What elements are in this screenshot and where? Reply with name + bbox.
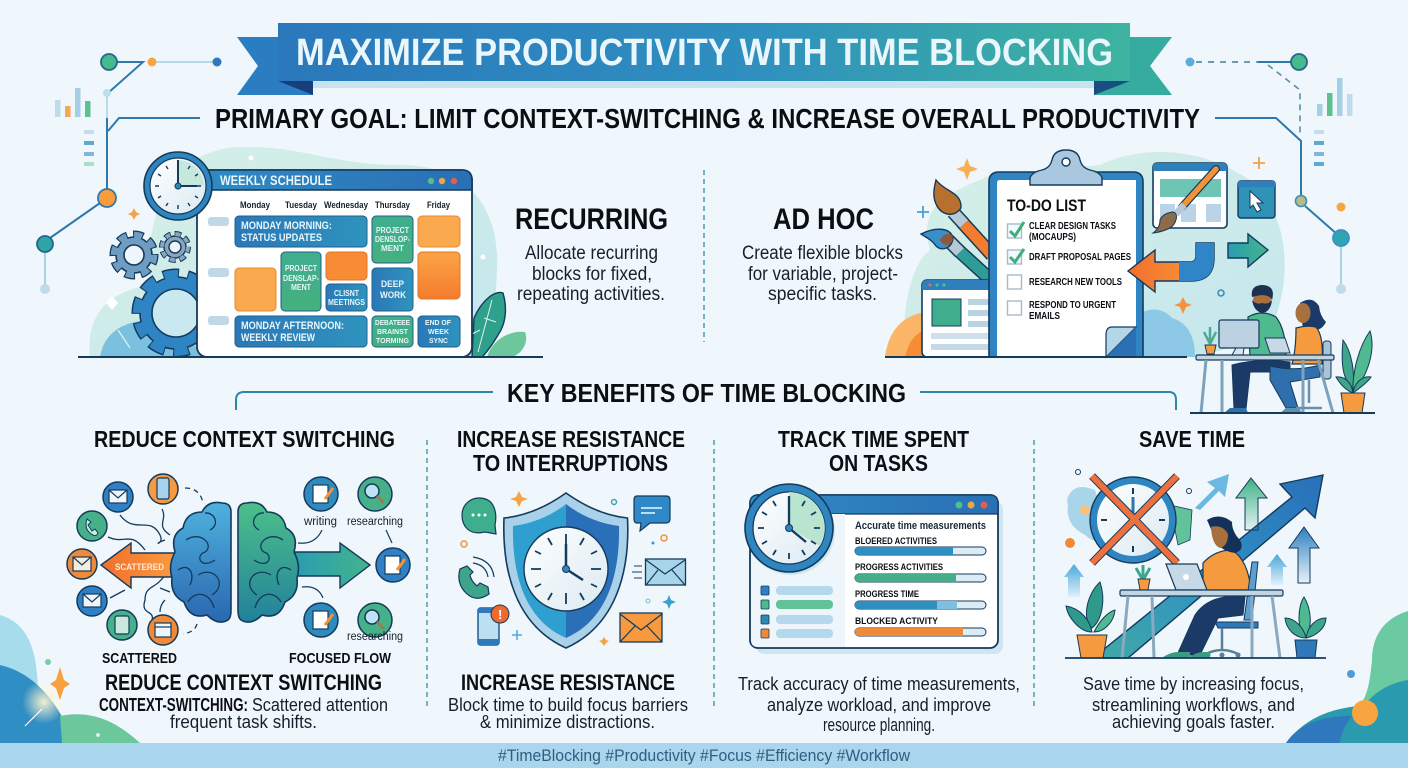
recurring text block: Allocate recurring xyxy=(525,243,658,264)
panel: increase resistance xyxy=(448,426,688,732)
description: resource planning. xyxy=(823,715,935,735)
browser window with brush xyxy=(1153,163,1227,233)
schedule window: TORMING xyxy=(376,336,409,345)
clipboard to-do list: CLEAR DESIGN TASKS xyxy=(1029,221,1116,232)
left plant xyxy=(1066,582,1115,658)
ground line xyxy=(885,356,1187,358)
schedule window: DENSLOP- xyxy=(375,235,410,244)
schedule window: CLISNT xyxy=(334,289,359,298)
day labels: Friday xyxy=(427,200,451,211)
icon: shield with clock xyxy=(504,493,628,648)
desk xyxy=(1196,355,1334,413)
schedule blocks xyxy=(235,216,460,347)
schedule window: SYNC xyxy=(429,336,449,345)
ad hoc heading: AD HOC xyxy=(773,203,874,236)
cloud behind clock xyxy=(1067,487,1110,542)
description: achieving goals faster. xyxy=(1112,712,1275,732)
network decoration: top left xyxy=(37,54,222,294)
schedule window: END OF xyxy=(425,318,451,327)
footer band with hashtags xyxy=(0,743,1408,768)
clipboard to-do list: DRAFT PROPOSAL PAGES xyxy=(1029,252,1131,263)
illustration: weekly schedule xyxy=(78,147,543,357)
key benefits heading xyxy=(236,378,1176,410)
heading: TO INTERRUPTIONS xyxy=(473,450,668,476)
footer band with hashtags: #TimeBlocking #Productivity #Focus #Efficiency #Workflow xyxy=(498,746,911,765)
schedule window: DENSLAP- xyxy=(283,274,319,283)
schedule window: WEEKLY REVIEW xyxy=(241,332,315,344)
focus labels: writing xyxy=(303,516,337,528)
schedule window: MONDAY MORNING: xyxy=(241,220,332,232)
schedule window: MONDAY AFTERNOON: xyxy=(241,320,344,332)
clipboard to-do list: RESEARCH NEW TOOLS xyxy=(1029,277,1122,288)
measurement bars: PROGRESS ACTIVITIES xyxy=(855,562,943,572)
arrow: green right xyxy=(1228,234,1268,267)
cursor tile xyxy=(1238,181,1275,218)
scattered icons xyxy=(67,474,178,645)
title banner xyxy=(237,23,1172,95)
recurring text block xyxy=(515,203,668,305)
schedule window: WEEK xyxy=(428,327,450,336)
icon: sparkles xyxy=(917,158,1224,314)
recurring text block: repeating activities. xyxy=(517,284,665,305)
woman xyxy=(1265,300,1331,413)
icon: phone alert: ! xyxy=(498,607,502,622)
description: CONTEXT-SWITCHING: xyxy=(99,695,248,715)
illustration: to-do list and creative tools xyxy=(885,150,1285,357)
clipboard to-do list: RESPOND TO URGENT xyxy=(1029,300,1116,311)
illustration: brain: SCATTERED xyxy=(115,562,164,573)
icon: wall clock xyxy=(144,152,212,220)
clipboard to-do list: (MOCAUPS) xyxy=(1029,232,1076,243)
icon: clock xyxy=(745,484,835,575)
arrow: focused right xyxy=(295,543,370,588)
icon: phone call xyxy=(459,557,494,598)
schedule window: PROJECT xyxy=(376,226,409,235)
icon: chat bubbles xyxy=(462,496,670,534)
right plant xyxy=(1285,597,1326,658)
description: Save time by increasing focus, xyxy=(1083,674,1304,694)
person working xyxy=(1162,516,1258,658)
icon: leaves xyxy=(470,292,526,357)
subheading: REDUCE CONTEXT SWITCHING xyxy=(105,670,382,695)
arrow: big upward xyxy=(1103,475,1323,658)
schedule window: BRAINST xyxy=(377,327,408,336)
day labels: Thursday xyxy=(375,200,411,211)
description xyxy=(1083,674,1304,732)
icon: gears xyxy=(114,234,215,352)
schedule window: MENT xyxy=(381,244,404,253)
description: Scattered attention xyxy=(252,695,388,715)
schedule window: MENT xyxy=(291,283,311,292)
time tracker window xyxy=(750,495,1003,654)
schedule window: STATUS UPDATES xyxy=(241,232,322,244)
panel: reduce context switching xyxy=(67,426,410,732)
clipboard to-do list: EMAILS xyxy=(1029,311,1060,322)
desk xyxy=(1120,590,1283,658)
arrow: curved orange to blue xyxy=(1128,243,1214,292)
panel: track time spent xyxy=(738,426,1020,735)
key benefits heading: KEY BENEFITS OF TIME BLOCKING xyxy=(507,378,906,408)
measurement bars: BLOCKED ACTIVITY xyxy=(855,616,938,626)
description: analyze workload, and improve xyxy=(767,695,991,715)
ad hoc text block: for variable, project- xyxy=(748,264,898,285)
heading: SAVE TIME xyxy=(1139,426,1245,452)
ground line xyxy=(78,356,543,358)
illustration: brain xyxy=(67,474,410,645)
label: focused flow: FOCUSED FLOW xyxy=(289,650,392,667)
measurement bars: BLOERED ACTIVITIES xyxy=(855,536,937,546)
description: streamlining workflows, and xyxy=(1092,695,1295,715)
clipboard to-do list: TO-DO LIST xyxy=(1007,196,1087,215)
description: & minimize distractions. xyxy=(480,712,655,732)
icon: monitor and plant xyxy=(1204,320,1259,355)
heading: REDUCE CONTEXT SWITCHING xyxy=(94,426,395,452)
network decoration: top right xyxy=(1186,54,1352,294)
background blob xyxy=(90,147,497,357)
heading xyxy=(457,426,685,476)
icon: potted plant xyxy=(1336,331,1372,413)
label: scattered: SCATTERED xyxy=(102,650,177,667)
day labels: Wednesday xyxy=(324,200,369,211)
panel: save time xyxy=(1064,426,1326,732)
focus icons xyxy=(304,477,410,637)
right hemisphere xyxy=(238,502,298,622)
schedule window: DEBATEEE xyxy=(375,318,410,327)
measurement bars: PROGRESS TIME xyxy=(855,589,919,599)
description: frequent task shifts. xyxy=(170,712,317,732)
schedule window: WEEKLY SCHEDULE xyxy=(220,173,332,188)
left hemisphere xyxy=(171,502,231,622)
heading xyxy=(778,426,969,476)
description: Track accuracy of time measurements, xyxy=(738,674,1020,694)
icon: sparkles xyxy=(461,491,676,646)
primary goal heading: PRIMARY GOAL: LIMIT CONTEXT-SWITCHING & INCREASE OVERALL PRODUCTIVITY xyxy=(215,103,1200,134)
day labels: Tuesday xyxy=(285,200,318,211)
recurring text block: blocks for fixed, xyxy=(532,264,652,285)
day labels: Monday xyxy=(240,200,271,211)
icon: phone alert xyxy=(478,605,509,645)
illustration: brain: researching xyxy=(347,516,403,528)
subheading: INCREASE RESISTANCE xyxy=(461,670,675,695)
measurement bars xyxy=(855,520,986,636)
illustration: save time xyxy=(1064,470,1326,658)
corner decoration: bottom left xyxy=(0,615,140,743)
illustration: brain: researching xyxy=(347,631,403,643)
browser window left xyxy=(922,280,994,357)
plant on desk xyxy=(1136,565,1150,590)
heading: INCREASE RESISTANCE xyxy=(457,426,685,452)
icon: paint brushes xyxy=(921,180,992,281)
ad hoc text block: specific tasks. xyxy=(768,284,877,305)
icon: sparkle xyxy=(128,208,140,220)
corner decoration: bottom right xyxy=(1286,611,1408,743)
schedule window: PROJECT xyxy=(285,264,317,273)
heading: ON TASKS xyxy=(829,450,928,476)
description xyxy=(738,674,1020,735)
measurement bars: Accurate time measurements xyxy=(855,520,986,532)
description xyxy=(99,695,388,732)
icon: envelopes xyxy=(620,559,686,642)
description xyxy=(448,695,688,732)
schedule window xyxy=(197,170,472,357)
arrows: small upward xyxy=(1064,474,1319,597)
day labels xyxy=(240,200,451,211)
scattered squiggles xyxy=(108,509,170,620)
recurring heading: RECURRING xyxy=(515,203,668,236)
heading: TRACK TIME SPENT xyxy=(778,426,969,452)
man xyxy=(1224,285,1290,413)
bracket xyxy=(236,392,1176,410)
clipboard to-do list xyxy=(989,150,1143,357)
arrow: scattered left xyxy=(101,543,178,588)
legend list xyxy=(761,586,833,638)
illustration: two people at a desk xyxy=(1190,285,1375,413)
title text: MAXIMIZE PRODUCTIVITY WITH TIME BLOCKING xyxy=(296,32,1113,74)
background blob xyxy=(904,152,1285,357)
ad hoc text block: Create flexible blocks xyxy=(742,243,903,264)
icon: crossed-out clock xyxy=(1090,476,1177,563)
schedule window: DEEP xyxy=(381,279,405,290)
ad hoc text block xyxy=(742,203,903,305)
schedule window: MEETINGS xyxy=(328,298,366,307)
description: Block time to build focus barriers xyxy=(448,695,688,715)
schedule window: WORK xyxy=(380,290,406,301)
